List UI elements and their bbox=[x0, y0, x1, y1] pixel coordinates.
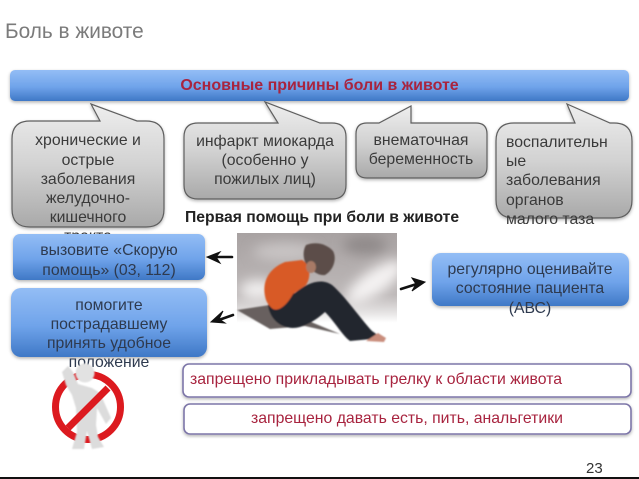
arrow: to monitoring box bbox=[401, 278, 425, 291]
photo: person with abdominal pain bbox=[237, 233, 410, 345]
callout: inflammatory diseases: малого таза bbox=[506, 211, 594, 228]
callout: ectopic pregnancy bbox=[356, 106, 487, 178]
arrow: to position box bbox=[211, 311, 233, 323]
title: Боль в животе bbox=[5, 20, 144, 43]
warning: no food, drink, analgesics bbox=[184, 404, 631, 434]
page number: 23 bbox=[586, 460, 603, 477]
callout: ectopic pregnancy: беременность bbox=[369, 151, 473, 168]
callout: chronic diseases bbox=[12, 104, 164, 245]
callout: chronic diseases: заболевания bbox=[41, 171, 135, 188]
callout: inflammatory diseases: воспалительн bbox=[506, 134, 608, 151]
callout: chronic diseases: желудочно- bbox=[46, 190, 130, 207]
callout: myocardial infarction bbox=[184, 102, 346, 199]
header bar: main causes: Основные причины боли в животе bbox=[180, 77, 459, 94]
box: monitor the patient bbox=[432, 253, 629, 317]
header bar: main causes bbox=[10, 70, 629, 101]
warning: no food, drink, analgesics: запрещено давать есть, пить, анальгетики bbox=[251, 410, 563, 427]
callout: chronic diseases: кишечного bbox=[50, 209, 127, 226]
callout: myocardial infarction: инфаркт миокарда bbox=[196, 133, 334, 150]
box: comfortable position: пострадавшему bbox=[51, 316, 168, 333]
arrow: to ambulance box bbox=[207, 252, 232, 263]
warning: no heating pad bbox=[183, 364, 631, 397]
box: comfortable position: помогите bbox=[75, 297, 143, 314]
bottom rule bbox=[0, 477, 639, 479]
box: call ambulance: помощь» (03, 112) bbox=[42, 262, 176, 279]
callout: ectopic pregnancy: внематочная bbox=[374, 132, 468, 149]
callout: chronic diseases: острые bbox=[62, 152, 115, 169]
callout: chronic diseases: хронические и bbox=[35, 132, 141, 149]
callout: inflammatory diseases: заболевания bbox=[506, 172, 601, 189]
box: monitor the patient: (АВС) bbox=[509, 300, 551, 317]
callout: inflammatory diseases: органов bbox=[506, 192, 564, 209]
box: monitor the patient: регулярно оценивайте bbox=[448, 261, 613, 278]
box: comfortable position: положение bbox=[69, 354, 150, 371]
box: call ambulance: вызовите «Скорую bbox=[40, 242, 178, 259]
subheading: first aid: Первая помощь при боли в животе bbox=[185, 209, 459, 226]
box: call ambulance bbox=[13, 234, 205, 280]
icon: prohibition sign with figure bbox=[56, 364, 120, 449]
box: monitor the patient: состояние пациента bbox=[456, 280, 604, 297]
callout: myocardial infarction: (особенно у bbox=[221, 152, 309, 169]
callout: inflammatory diseases bbox=[496, 104, 632, 228]
box: comfortable position: принять удобное bbox=[47, 335, 171, 352]
warning: no heating pad: запрещено прикладывать грелку к области живота bbox=[190, 371, 562, 388]
callout: inflammatory diseases: ые bbox=[506, 153, 526, 170]
callout: chronic diseases: тракта bbox=[64, 228, 112, 245]
callout: myocardial infarction: пожилых лиц) bbox=[214, 171, 316, 188]
box: comfortable position bbox=[11, 288, 207, 371]
